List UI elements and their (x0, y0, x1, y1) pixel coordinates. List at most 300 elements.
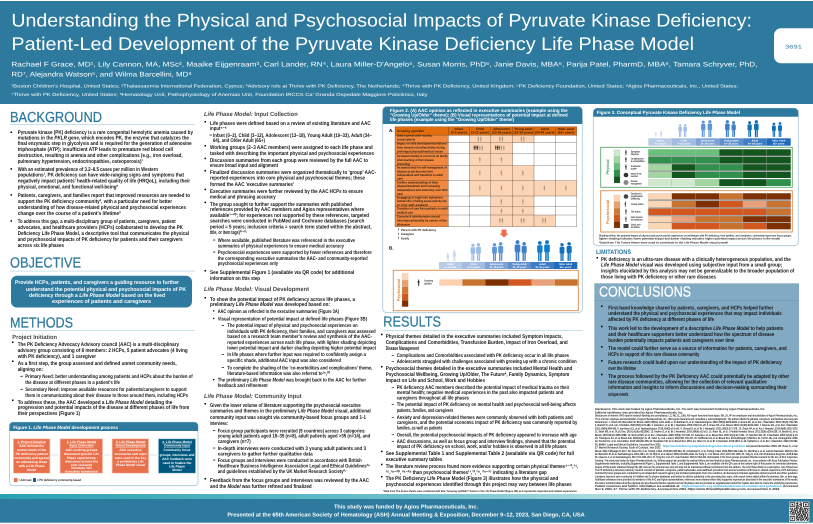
community input text: In-depth interviews were conducted with 3 young adult patients and 3 (218, 446, 366, 452)
psychosocial impact chart (393, 270, 578, 311)
results text: Complications and Comorbidities associated with PK deficiency occur in all life phases (397, 353, 569, 359)
community input text: and the Model was further refined and finalized (210, 484, 312, 490)
community input text: caregivers (n=7) (218, 439, 251, 445)
step 4: community input: Life Phase (169, 464, 185, 468)
visual development text: To complete the shading of the 'co-morbidities and complications' theme, (227, 366, 373, 372)
figure 2 title: Figure 2. (A) AAC opinion as reflected in executive summaries (example using the (390, 108, 568, 113)
panel label A: A. (389, 128, 394, 133)
affiliations: ⁷Thrive with PK Deficiency, United States; ⁸Hematology Unit, Pathophysiology of Anemias Unit, Foundation IRCCS Ca' Granda Ospedale Maggiore Policlinico, Italy (11, 92, 428, 97)
vertical axis label: Psychosocial (396, 279, 401, 301)
methods bullets: their perspectives (Figure 1) (18, 411, 80, 417)
table row labels: disease as pts become more (397, 169, 433, 173)
input collection text: formed the AAC 'executive summaries' (210, 182, 294, 188)
input collection text: title, or item tags)²¹⁻²⁵ (210, 230, 247, 236)
methods bullets: with PK deficiency), and 1 caregiver (17, 354, 97, 360)
community input text: Given the lower volume of literature supporting the psychosocial executive (210, 403, 361, 409)
results text: caregivers, and the potential economic impact of PK deficiency was commonly reported by (397, 420, 577, 426)
authors: Rachael F Grace, MD¹, Lily Cannon, MA, MSc², Maaike Eijgenraam³, Carl Lander, RN⁴, Laura Miller-D'Angelo⁵, Susan Morris, PhD⁶, Janie Davis, MBA⁶, Parija Patel, PharmD, MBA⁶, Tamara Schryver, PhD, (11, 61, 758, 68)
growing up icon and label: Growing (424, 280, 433, 282)
theme labels: The future (631, 210, 641, 214)
life phase silhouettes (447, 240, 572, 261)
step 1: project initiation: 1. Project Initiation (17, 440, 46, 444)
input collection text: available¹⁻²⁰; for experiences not supported by these references, targeted (210, 212, 369, 219)
life phase age bars: 34–64 years (748, 143, 763, 146)
step 3: visual development: Phase Model visual (116, 463, 145, 467)
references and disclosures: Disclosures: This work was funded by Agios Pharmaceuticals, Inc. The AAC was honorarium funded by Agios Pharmaceuticals, Inc. (595, 407, 765, 411)
heading: objective: OBJECTIVE (10, 256, 81, 272)
background bullets: Pyruvate kinase (PK) deficiency is a rare congenital hemolytic anemia caused by (18, 130, 193, 136)
input collection text: summaries of physical experiences to ensure medical accuracy (218, 244, 344, 250)
authors (11, 61, 758, 79)
conclusions text: rare disease communities, allowing for the collection of relevant qualitative (608, 380, 767, 386)
heatmap cells (648, 149, 791, 186)
life phase age bars: Infant (657, 140, 664, 142)
table row labels: Increased need for self-management of (397, 166, 448, 170)
conclusions text: affected by PK deficiency at different phases of life (608, 317, 714, 323)
background bullets: With an estimated prevalence of 3.2–8.5 cases per million in Western (18, 167, 158, 173)
table header row: (3-12 years) (471, 130, 489, 134)
conclusions text: over the lifetime (608, 366, 636, 372)
heading: background: BACKGROUND (10, 110, 102, 126)
input collection text: Infant (0–2), Child (3–12), Adolescent (13–18), Young Adult (19–33), Adult (34– (213, 133, 372, 139)
step 4: community input (158, 439, 196, 473)
background bullets: support the PK deficiency community², with a particular need for better (18, 199, 173, 205)
arrow (150, 454, 157, 456)
panel: background (10, 110, 195, 249)
step 3: visual development: AAC executive (119, 448, 142, 452)
shading key (402, 273, 408, 307)
conclusions text (601, 306, 790, 398)
theme labels: Growing up/older (631, 203, 644, 206)
community input text (204, 403, 371, 490)
life phase silhouettes (655, 120, 782, 137)
life phase age bars: 19–33 years (512, 266, 527, 269)
input collection text: Psychosocial experiences were supported by fewer references and therefore (218, 250, 372, 256)
results text: families, as well as patients (397, 426, 442, 432)
results text: AAC discussions, as well as focus group and interview findings, showed that the potential (397, 439, 575, 445)
background bullets: and psychosocial impacts of PK deficiency for patients and their caregivers (18, 237, 183, 243)
subheading: input collection: Life Phase Model: Input Collection (204, 111, 298, 118)
visual development text: preliminary Life Phase Model was developed based on: (210, 302, 330, 308)
visual development text: based on a research team member's review and synthesis of the AAC- (227, 334, 372, 340)
community input text: summaries and themes in the preliminary Life Phase Model visual, additional (210, 408, 371, 414)
input collection text: Finalized discussion summaries were organized thematically to 'group' AAC- (210, 170, 376, 176)
objective callout: Provide HCPs, patients, and caregivers a guiding resource to further (15, 280, 180, 286)
input collection text: Discussion summaries from each group were reviewed by the full AAC to (210, 158, 369, 164)
methods bullets (12, 342, 193, 417)
methods bullets: As a first step, the group assessed and defined unmet community needs, (18, 361, 177, 367)
background bullets: pulmonary hypertension, endocrinopathies, osteoporosis)¹ (18, 159, 143, 165)
background bullets: final enzymatic step in glycolysis and is required for the generation of adenosine (18, 141, 192, 147)
table row labels: instead of/or of feeling sexual maturity due (397, 199, 447, 203)
panel: limitations (596, 249, 794, 280)
methods bullets: The PK Deficiency Advocacy Advisory council (AAC) is a multi-disciplinary (18, 342, 179, 348)
physical impact heatmap (601, 147, 792, 187)
background bullets: triphosphate (ATP); insufficient ATP leads to premature red blood cell (18, 147, 173, 153)
step 4: community input: 4. Life Phase Model (162, 440, 192, 444)
impact shading row (439, 279, 578, 286)
theme labels (624, 192, 644, 229)
conclusions text: This work led to the development of a descriptive Life Phase Model to help patients (608, 326, 783, 332)
table row labels: (heredity) (397, 162, 410, 166)
input collection text: medical and phrasing accuracy (210, 194, 276, 200)
table row labels: disease/treatment and increasing (397, 184, 440, 188)
axis label: psychosocial: Psychosocial (605, 200, 610, 224)
background bullets: physical, emotional, and functional well-being² (18, 184, 118, 190)
subheading: project initiation: Project Initiation (12, 334, 57, 341)
methods bullets: the disease at different phases in a patient's life (25, 380, 120, 386)
results text: The literature review process found more evidence supporting certain physical themes⁴⁻¹²,¹⁴, (386, 464, 579, 470)
table header row: Growing up/older (397, 129, 425, 133)
table: growing up/older opinions (395, 127, 577, 227)
community input text: Feedback from the focus groups and interviews was reviewed by the AAC (210, 478, 369, 484)
visual development text: In life phases where further input was required to confidently assign a (227, 352, 366, 358)
input collection text: Where available, published literature was referenced in the executive (218, 238, 355, 244)
figure 3 footnote: *Data from The Future theme were used to contribute to the Life Phase Model visual overall (599, 240, 728, 244)
title (11, 10, 752, 54)
heading: conclusions: CONCLUSIONS (599, 285, 691, 301)
step 1: project initiation: unmet needs of the (17, 448, 47, 452)
methods bullets: Primary Need: better understanding among patients and HCPs about the burden of (25, 374, 193, 380)
table row labels: medical care (397, 210, 413, 214)
life phase age bars: Older Adult (772, 140, 786, 142)
table row labels: prolonged physical/medical issues (397, 150, 443, 154)
background bullets: advocates, and healthcare providers (HCPs) collaborated to develop the PK (18, 225, 183, 231)
table row labels: to low self-esteem (397, 203, 428, 207)
table header row: (0-2 years) (451, 130, 467, 134)
conclusions text: burden potentially impacts patients and caregivers over time (608, 338, 734, 344)
theme labels (624, 150, 645, 186)
life phase age bars: 13–18 years (700, 143, 715, 146)
input collection text: Life phases were defined based on a review of existing literature and AAC (210, 121, 371, 127)
title: Patient-Led Development of the Pyruvate Kinase Deficiency Life Phase Model (11, 33, 694, 54)
table header row: Adolescent (493, 127, 511, 131)
background bullets: populations¹, PK deficiency can have wide-ranging signs and symptoms that (18, 172, 184, 178)
limitations text: those living with PK deficiency or other rare diseases (601, 274, 716, 280)
table legend (398, 228, 436, 240)
input collection text: information on this step (210, 276, 261, 282)
input collection text: period = 5 years; inclusion criteria = search term stated within the abstract, (210, 224, 372, 230)
input collection text: The group sought to further support the summaries with published (210, 202, 352, 208)
figure 2 title: life phases (example using the "Growing Up/Older" theme) (390, 117, 514, 122)
table row labels: from missed school/activities during (397, 146, 445, 150)
input collection text: references provided by AAC members and Agios representatives where (210, 207, 364, 213)
results text: The PK Deficiency Life Phase Model (Figure 3) illustrates how the physical and (386, 476, 558, 482)
theme labels: burden (631, 168, 637, 170)
input collection text: psychosocial experiences only (218, 261, 278, 267)
methods bullets: To address these, the AAC developed a Life Phase Model detailing the (18, 400, 172, 406)
step 2: input collection: discussed around the (65, 460, 98, 464)
arrow (104, 454, 111, 456)
life phase age bars (648, 138, 791, 146)
background bullets: change over the course of a patient's lifetime³ (18, 211, 121, 217)
header band (0, 1, 813, 104)
panel: community input (204, 393, 371, 490)
references and disclosures: Nov 9, 2023. 37. Thrive with PK Deficiency. Accessed Nov 2023. https://www.thrivewithpkdeficiency.com. Accessed Nov 9, 2023. (595, 487, 780, 491)
panel label B: B. (389, 246, 394, 250)
affiliations: ¹Boston Children's Hospital, United States; ²Thalassaemia International Federation, Cyprus; ³Advisory role at Thrive with PK Deficiency, The Netherlands; ⁴Thrive with PK Deficiency, United Kingdom; ⁵PK Deficiency Foundation, United States; ⁶Agios Pharmaceuticals, Inc., United States; (11, 83, 738, 88)
table row labels: Engaging in high-risk behaviors (397, 196, 443, 200)
panel: methods (10, 315, 198, 486)
life phase age bars: 0–2 years (445, 266, 457, 269)
results text: Adolescents struggled with challenges associated with growing up with a chronic condition (397, 359, 577, 365)
input collection text: the corresponding executive summaries the AAC- and community-reported (218, 256, 368, 262)
life phase age bars: 3–12 years (467, 266, 481, 269)
input collection text: input⁴⁻⁶ (210, 126, 227, 132)
community input text: Healthcare Business Intelligence Association Legal and Ethical Guidelines²⁶ (218, 464, 370, 470)
figure 1 legend (14, 478, 81, 482)
figure 2 title: "Growing Up/Older" theme); (B) Visual representations of potential impact at defined (390, 112, 568, 117)
background bullets: Patients, caregivers, and families report that improved resources are needed to (18, 193, 191, 199)
panel: visual development (204, 286, 376, 389)
limitations text (596, 257, 794, 280)
results text: Complications and Comorbidities, Transfusion Burden, Impact of Iron Overload, and (386, 340, 568, 346)
panel: results (381, 315, 583, 493)
table row labels: Concerns & misinformation around (397, 215, 440, 219)
visual development text: literature-based information was also referred to¹⁶,²⁰ (227, 371, 331, 377)
arrow (51, 454, 59, 456)
life phase age bars: Young Adult (724, 140, 739, 142)
table person icons (474, 137, 567, 223)
table header row: (65+ years) (558, 130, 574, 134)
table row labels: care (397, 192, 403, 196)
results text: Psychosocial themes detailed in the executive summaries included Mental Health and (386, 366, 572, 372)
visual development text: individuals with PK deficiency, their families, and caregivers was assessed (227, 329, 376, 335)
background bullets: mutations in the PKLR gene, which encodes PK, the enzyme that catalyzes the (18, 136, 189, 142)
theme labels: Emotional & (631, 192, 642, 196)
limitations text: Life Phase Model visual was developed using subjective input from a small group; (601, 262, 782, 268)
figure 1 legend: = PK deficiency community-based (37, 478, 81, 482)
results text: Psychosocial Wellbeing, Growing Up/Older, The Future*, Family Dynamics, Symptom (386, 372, 569, 378)
table row labels: Increased anxiety & concerns on family (397, 154, 448, 158)
table header row: Child (476, 127, 484, 131)
theme labels: and symptoms (631, 218, 643, 222)
figure 2 card (383, 107, 582, 313)
references and disclosures: Accessed November 2023. 28. Rose C, et al. (746, 444, 798, 448)
results text: Anxiety and depression-related themes were commonly observed with both patients and (397, 415, 573, 421)
table row labels: Impact on child development/childhood (397, 142, 447, 146)
reference link: https://www.mrs.org.uk/standards/code-of-conduct-and-guidelines (682, 484, 782, 488)
objective callout: deficiency through a Life Phase Model based on the lived (29, 293, 165, 299)
QR code (789, 502, 809, 522)
visual development text: To show the potential impact of PK deficiency across life phases, a (210, 297, 356, 303)
results text: patients, families, and caregivers (397, 408, 453, 414)
results text: impact of PK deficiency on school, work, and/or hobbies is observed in all life phases (397, 444, 567, 450)
table row labels: care (397, 177, 403, 181)
step 1: project initiation: Model (27, 468, 36, 472)
visual development text: Visual representation of potential impact at defined life phases (Figure 3B) (218, 316, 367, 322)
visual development text: lower potential impact and darker shading depicting higher potential impact (227, 346, 376, 352)
results text: Overall, the potential psychosocial impacts of PK deficiency appeared to increase with age (397, 432, 577, 438)
input collection text (204, 121, 376, 282)
figure 1 title: Figure 1. Life Phase Model development process (13, 425, 118, 430)
life phase age bars: 3–12 years (677, 143, 691, 146)
step 1: project initiation: PK deficiency patient (16, 452, 49, 456)
community input text: young adult patients aged 18–35 (n=8), adult patients aged >35 (n=14), and (218, 434, 370, 440)
life phase age bars: Adolescent (490, 263, 503, 266)
references and disclosures: Accessed (783, 484, 798, 488)
background bullets: understanding of how disease-related physical and psychosocial experiences (18, 205, 186, 211)
input collection text: searches were conducted in PubMed and Cochrane databases (search (210, 218, 364, 224)
results text: Disease Management (386, 346, 419, 352)
life phase age bars: Infant (447, 263, 454, 266)
step 3: visual development (112, 439, 149, 473)
life phase age bars: Child (470, 263, 477, 266)
input collection text: tasked with describing the important physical and psychosocial experiences (210, 151, 374, 157)
step 4: community input: Community focus (164, 448, 191, 452)
table header row (397, 127, 575, 134)
community input text: community input was sought via community-based focus groups and 1-1 (210, 415, 366, 421)
input collection text: Executive summaries were further reviewed by the AAC HCPs to ensure (210, 189, 363, 195)
community input text: Focus group participants were recruited (9 countries) across 3 categories: (218, 428, 366, 434)
table header row: Infant (454, 127, 464, 131)
visual development text: reported experiences across each life phase, with lighter shading depicting (227, 340, 376, 346)
life phase age bars: Young Adult (512, 263, 527, 266)
references and disclosures: Patient resources and further information are available at: (595, 484, 680, 488)
visual development text: specific shade, additional AAC input was also considered (227, 358, 341, 364)
heading: methods: METHODS (10, 315, 73, 331)
step 1: project initiation: on addressing these (16, 460, 47, 464)
theme labels: overload (631, 175, 638, 178)
step 4: community input: Community Input (164, 444, 191, 448)
panel: input collection (204, 111, 376, 282)
figure 3 footnote (599, 234, 792, 244)
results text: caregivers throughout all life phases (397, 396, 469, 402)
life phase age bars: Adult (539, 263, 546, 266)
references and disclosures: Editorial assistance was provided by Agios Pharmaceuticals, Inc. (595, 410, 683, 414)
life phase age bars (439, 262, 577, 269)
table row labels: when learning of their disease (396, 158, 434, 162)
input collection text: reported experiences into core physical and psychosocial themes; these (210, 176, 365, 182)
results text: Impact on Life and School, Work and Hobbies (386, 378, 485, 384)
step 2: input collection: 'executive summaries' (65, 469, 99, 473)
visual development text (204, 297, 376, 389)
results text (381, 334, 579, 488)
table row labels: sexual maturity (397, 138, 415, 142)
growing up icon and label (418, 280, 433, 286)
step 2: input collection: 2. Life Phase Model (67, 440, 96, 444)
table header row: Adult (541, 127, 550, 131)
table header row: (19-33 years) (514, 130, 533, 134)
life phase age bars: Adult (752, 140, 758, 142)
results text: executive summary tables (386, 457, 442, 463)
background bullets: across six life phases (18, 243, 64, 249)
background bullets: To address this gap, a multi-disciplinary group of patients, caregivers, patient (18, 219, 176, 225)
table legend: Person with PK deficiency (401, 228, 436, 232)
step 2: input collection: discussed specific Life (64, 452, 99, 456)
background bullets: Deficiency Life Phase Model, a descriptive tool that communicates the physical (18, 231, 189, 237)
panel: conclusions (594, 283, 799, 403)
results text: Physical themes detailed in the executive summaries included Symptom Impacts, (386, 334, 563, 340)
input collection text: See Supplemental Figure 1 (available via QR code) for additional (210, 270, 355, 276)
figure 1 card (10, 422, 198, 486)
methods bullets: aligning on: (18, 367, 43, 373)
footer text: Presented at the 65th American Society of Hematology (ASH) Annual Meeting & Exposition, December 9–12, 2023, San Diego, CA, USA (227, 512, 585, 518)
objective callout: understand the potential physical and psychosocial impacts of PK (26, 287, 186, 293)
step 4: community input: groups, interviews and (160, 453, 194, 457)
table row labels: Delay in growth and/or reaching (397, 134, 432, 138)
step 1: project initiation (13, 439, 50, 473)
table row labels: Transition of care from pediatric to adult (397, 206, 448, 210)
theme labels: and hobbies (631, 226, 640, 229)
step 2: input collection (60, 439, 103, 473)
subheading: community input: Life Phase Model: Community Input (204, 393, 302, 400)
life phase age bars: Older Adult (559, 263, 572, 266)
theme labels: Disease (631, 180, 638, 183)
references and disclosures (595, 407, 798, 491)
step 1: project initiation: community and agreed (14, 456, 49, 460)
community input text: interviews: (210, 421, 228, 427)
step 4: community input: AAC feedback were (162, 457, 192, 461)
table header row: Young adult (514, 127, 533, 131)
footer text: This study was funded by Agios Pharmaceuticals, Inc. (334, 504, 478, 510)
table row labels: Further understanding of their (397, 180, 439, 184)
title: Understanding the Physical and Psychosocial Impacts of Pyruvate Kinase Deficiency: (11, 10, 752, 31)
subheading: visual development: Life Phase Model: Visual Development (204, 286, 309, 293)
shading key (614, 150, 620, 183)
background bullets: negatively impact patients' health-related quality of life (HRQoL), including their (18, 178, 191, 184)
objective callout (11, 276, 192, 308)
results text: The potential impact of PK deficiency on mental health and psychosocial well-being affects (397, 402, 576, 408)
step 4: community input: Model (172, 468, 182, 472)
input collection text: 64), and Older Adult (65+) (213, 138, 265, 144)
theme labels: Impact of iron (631, 172, 642, 176)
step 2: input collection: AAC working groups (66, 448, 98, 452)
objective callout: experiences of patients and caregivers (52, 299, 151, 305)
figure 3 footnote: lighter shading indicates lower potential impact and darker shading indicates higher potential impact across life phases in the model (599, 237, 780, 241)
theme labels: wellbeing (631, 198, 640, 200)
step 3: visual development: a preliminary Life (117, 460, 144, 464)
visual development text: The preliminary Life Phase Model was brought back to the AAC for further (218, 378, 366, 384)
background bullets (10, 130, 193, 249)
life phase age bars: 65+ years (560, 266, 572, 269)
step 3: visual development: were used in the key (114, 456, 146, 460)
footer band (0, 494, 813, 523)
community input text: Focus groups and interviews were conducted in accordance with British (218, 458, 362, 464)
methods bullets: Secondary Need: improve available resources for patients/caregivers to support (25, 387, 187, 393)
theme labels: Transfusion (631, 165, 641, 168)
results text: See Supplemental Table 1 and Supplemental Table 2 (available via QR code) for full (386, 451, 574, 457)
visual development text: feedback and refinement (218, 383, 268, 389)
theme labels: & comorbidities (631, 160, 645, 163)
axis label: physical: Physical (605, 160, 610, 174)
conclusions text: and their healthcare supporters better understand how the spectrum of disease (608, 332, 774, 338)
table header row: (34-64 years) (535, 130, 554, 134)
theme labels: School, work (631, 224, 641, 226)
table header row: (13-18 years) (492, 130, 511, 134)
affiliations (11, 83, 738, 97)
figure 3 title: Figure 3. Conceptual Pyruvate Kinase Deficiency Life Phase Model (597, 110, 740, 115)
figure 2 title (390, 108, 568, 122)
theme labels: Complications (631, 158, 644, 160)
table legend: Family (401, 236, 409, 240)
step 1: project initiation: AAC defined the (19, 444, 44, 448)
table header row: Older adult (558, 127, 575, 131)
poster number tab (774, 28, 813, 63)
life phase age bars: 34–64 years (535, 266, 550, 269)
theme labels: Family dynamics (631, 216, 643, 219)
step 3: visual development: 3. Life Phase Model (116, 440, 145, 444)
footer text (227, 504, 585, 518)
life phase age bars: 13–18 years (489, 266, 504, 269)
heatmap cells (648, 193, 791, 229)
life phase age bars: 0–2 years (654, 143, 666, 146)
methods bullets: advisory group consisting of 8 members: 2 HCPs, 5 patient advocates (4 living (18, 348, 188, 354)
panel: objective (10, 256, 195, 308)
table row labels: inheritance/heredity by carrier of the (397, 219, 447, 223)
step 1: project initiation: with a Life Phase (18, 464, 45, 468)
figure 1 legend: = AAC task (18, 478, 32, 482)
